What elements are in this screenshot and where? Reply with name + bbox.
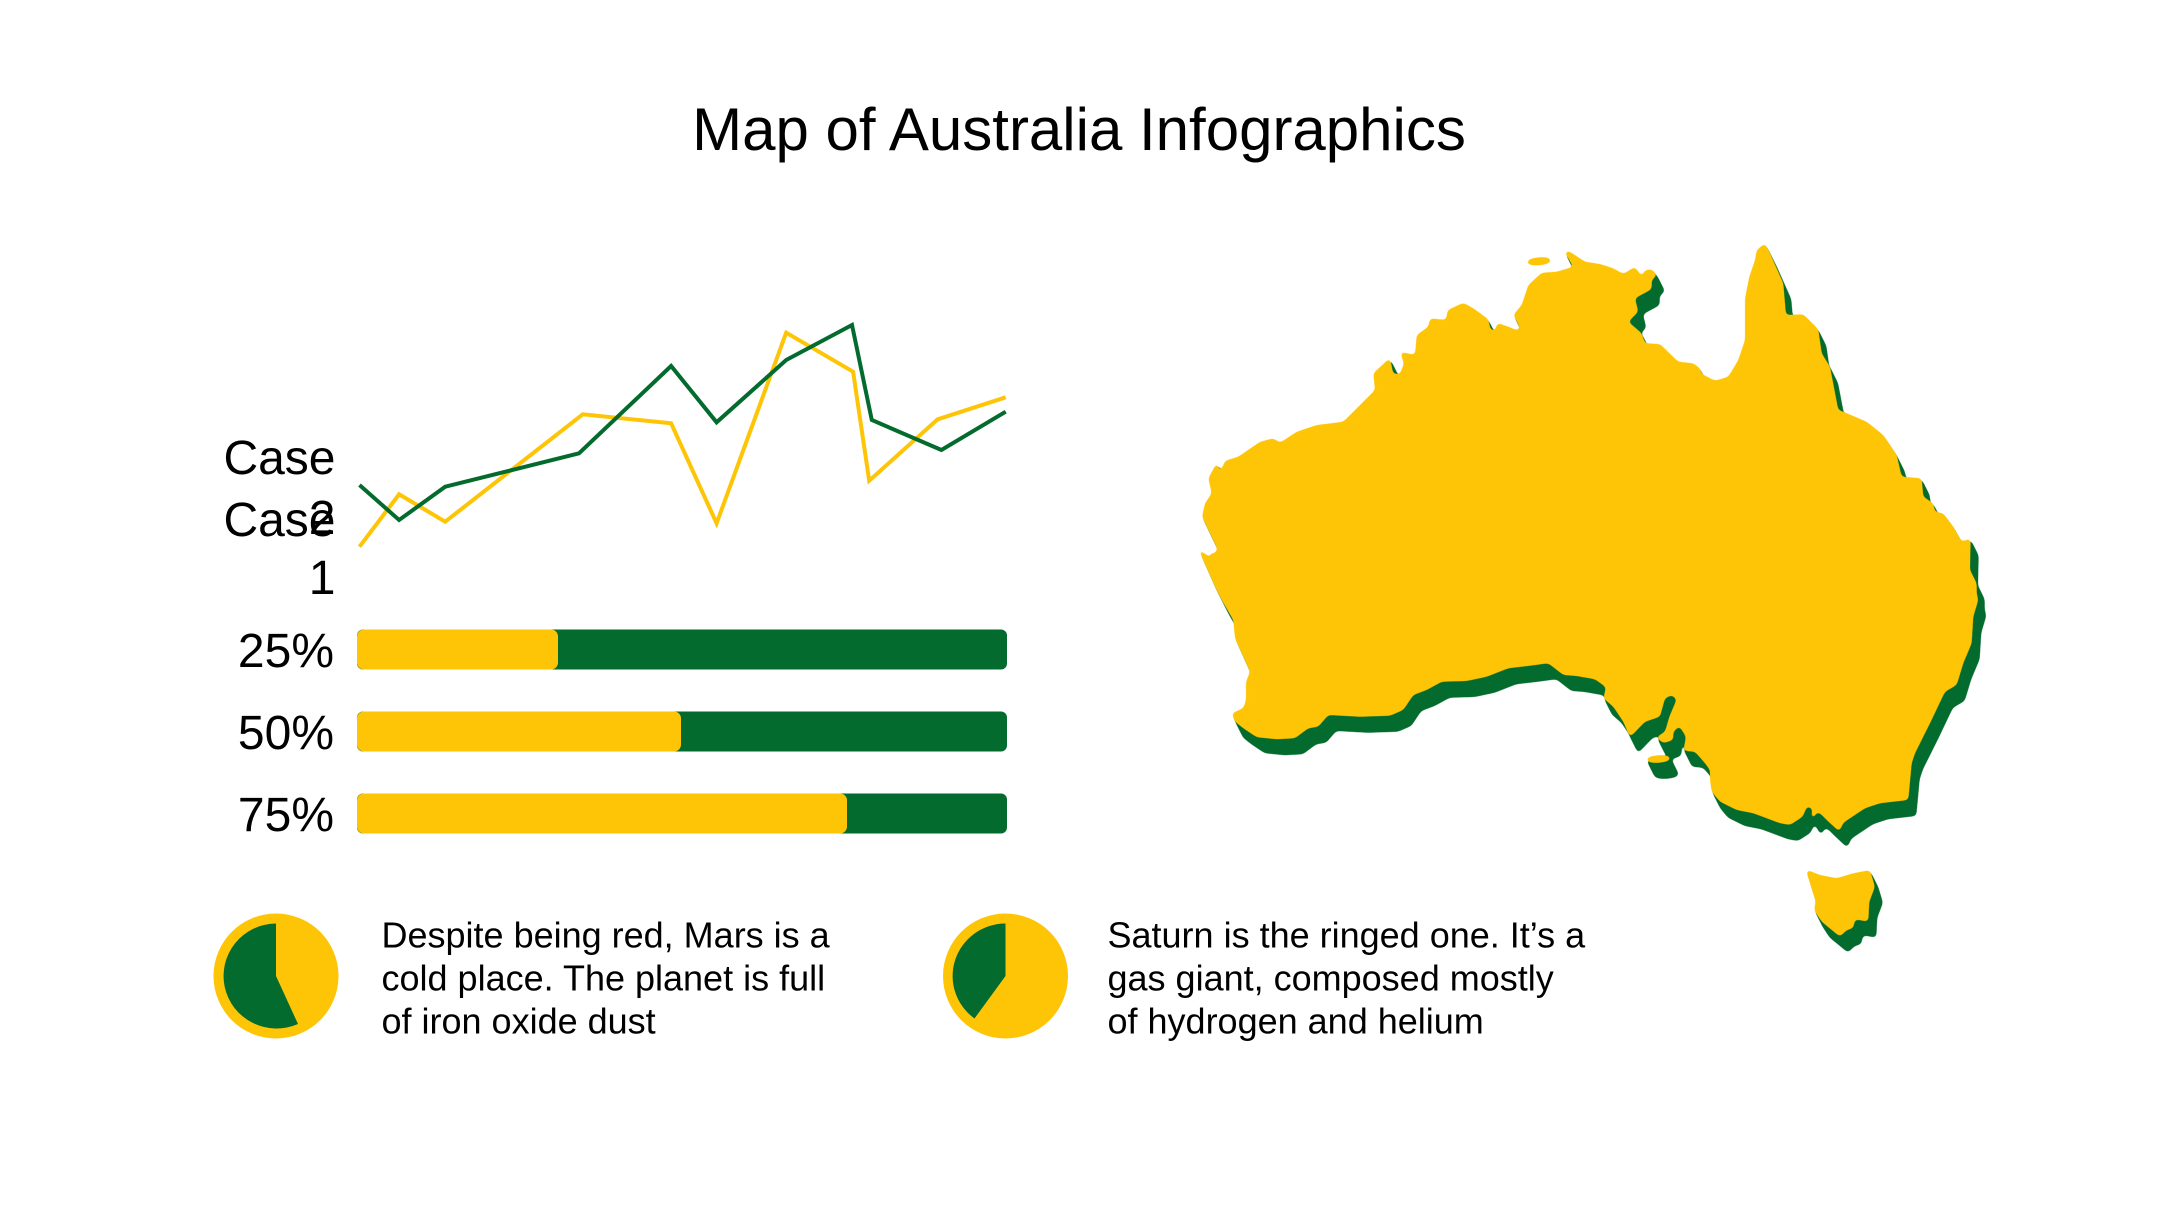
text: Saturn: gas giant, composed mostly — [1108, 958, 1554, 998]
bar 75%: 75% — [238, 789, 334, 842]
bar 75% — [238, 789, 1007, 842]
legend label: case 2: 2 — [309, 492, 336, 545]
text: Saturn: of hydrogen and helium — [1108, 1000, 1484, 1042]
bar 25%: 25% — [238, 625, 334, 678]
text: Mars: of iron oxide dust — [382, 1000, 656, 1042]
map of Australia — [1197, 243, 1986, 953]
text: Mars: Despite being red, Mars is a — [382, 914, 831, 956]
legend label: case 2: Case — [223, 432, 336, 485]
title: Map of Australia Infographics — [692, 96, 1466, 163]
map shadow — [1198, 245, 1986, 953]
text: Saturn: Saturn is the ringed one. It’s a — [1108, 914, 1586, 956]
bar 25% — [238, 625, 1007, 678]
line series: case 1 — [360, 333, 1006, 547]
text: Mars: cold place. The planet is full — [382, 958, 825, 998]
legend label: case 1: 1 — [309, 552, 336, 605]
bar 50% — [238, 707, 1007, 760]
line chart — [223, 325, 1006, 605]
legend label: case 1: Case — [223, 494, 336, 547]
pie: Saturn — [943, 914, 1068, 1038]
bar 50%: 50% — [238, 707, 334, 760]
line series: case 2 — [360, 325, 1006, 520]
pie: Mars — [214, 914, 338, 1038]
map land — [1197, 243, 1978, 937]
progress bars — [238, 625, 1007, 842]
